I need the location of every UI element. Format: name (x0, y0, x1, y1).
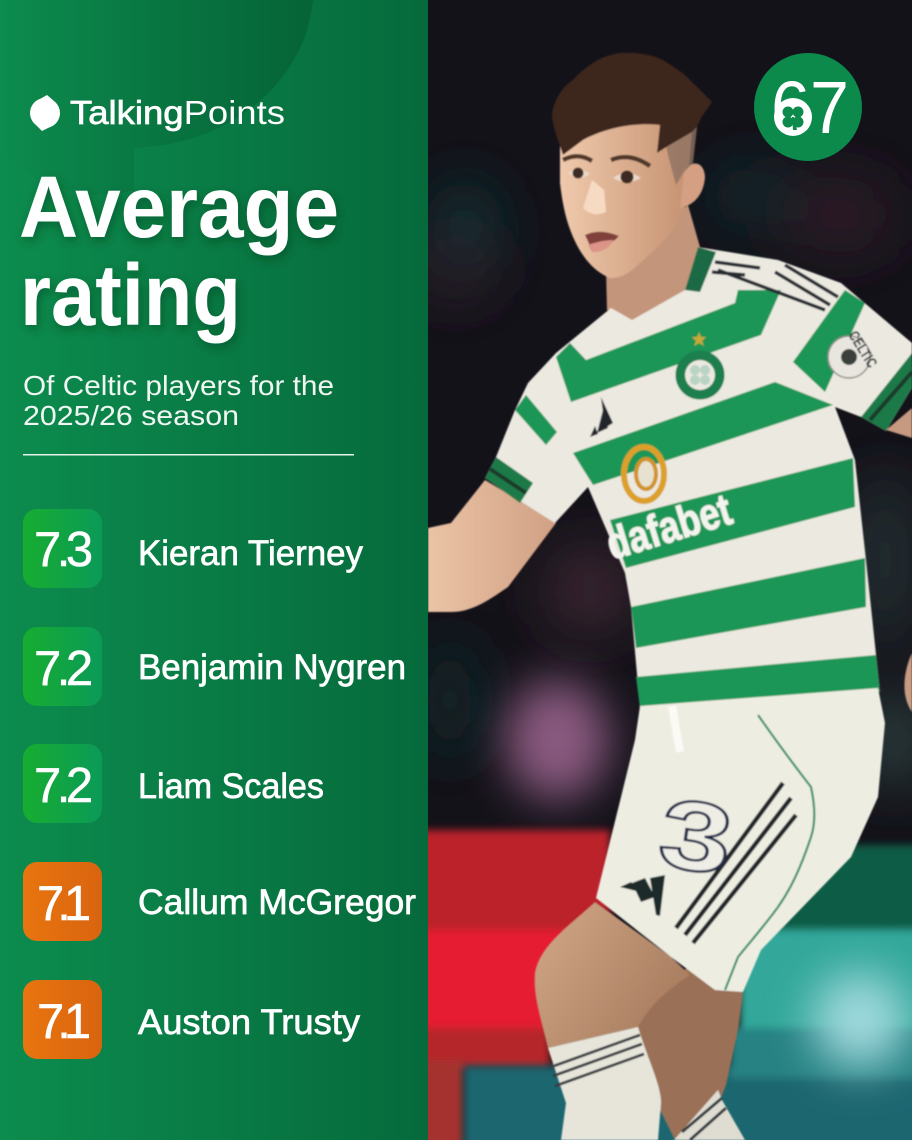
far leg and sock (636, 968, 746, 1140)
pink crowd blob (505, 680, 609, 800)
shorts drawstring (672, 706, 680, 752)
player name: Liam Scales (138, 767, 324, 806)
title: Average (19, 159, 339, 256)
logo mark (30, 95, 60, 131)
sleeve lettering: CELTIC (845, 328, 880, 371)
sponsor wordmark: dafabet (600, 483, 737, 570)
row: Benjamin Nygren 7.2 (23, 627, 406, 706)
rating badge (23, 862, 102, 941)
head (552, 53, 712, 278)
rating value: 7.2 (34, 759, 91, 813)
eyebrows (563, 156, 650, 166)
collar (685, 247, 716, 292)
nose (583, 180, 606, 214)
shoulder stripes (712, 262, 838, 310)
subtitle (23, 370, 334, 431)
shorts (596, 688, 885, 992)
sleeve band (793, 290, 865, 392)
rating value: 7.3 (34, 523, 92, 577)
adidas chest logo (590, 397, 613, 437)
adidas shorts logo (620, 875, 665, 916)
wordmark: Talking Points (70, 94, 285, 131)
hair (552, 53, 712, 155)
row: Liam Scales 7.2 (23, 744, 324, 823)
player name: Auston Trusty (138, 1003, 361, 1042)
brand logo (30, 94, 285, 131)
eyes (568, 169, 641, 182)
photo background: blurred stadium crowd (415, 0, 912, 1140)
shorts number: 3 (653, 777, 739, 896)
player name: Benjamin Nygren (138, 648, 406, 687)
hoop: sponsor (610, 458, 855, 568)
sleeve patch (828, 336, 870, 378)
clover (782, 106, 804, 130)
player illustration (428, 53, 912, 1140)
rating value: 7.2 (34, 642, 91, 696)
gold star (692, 332, 706, 346)
player name: Kieran Tierney (138, 534, 363, 573)
rating badge (23, 509, 102, 588)
shirt (485, 247, 912, 708)
green pitch-side board (464, 845, 912, 1140)
shorts piping (725, 715, 814, 990)
shorts side stripes (676, 783, 796, 943)
fade (664, 127, 697, 185)
rating badge (23, 744, 102, 823)
number 67: 67 (771, 66, 849, 149)
red advertising board (420, 830, 610, 1140)
badge: 67 clover (754, 53, 862, 161)
hoop: hem (636, 655, 880, 708)
pale light blobs on board (812, 972, 908, 1068)
ear (680, 164, 705, 208)
hoop: lower (631, 558, 866, 648)
subtitle: 2025/26 season (23, 400, 239, 431)
rating badge (23, 980, 102, 1059)
sponsor roundel (624, 447, 664, 501)
panel: left green background (0, 0, 428, 1140)
sleeve cuff (861, 353, 912, 431)
hoop: chest (573, 382, 833, 485)
row: Auston Trusty 7.1 (23, 980, 361, 1059)
mouth (585, 232, 619, 250)
left arm (428, 480, 556, 612)
rating value: 7.1 (37, 995, 89, 1049)
hoop: yoke (556, 290, 781, 402)
right forearm and hand (886, 408, 912, 712)
rating badge (23, 627, 102, 706)
neck (606, 205, 700, 325)
rating value: 7.1 (37, 877, 89, 931)
title (19, 159, 339, 344)
row: Callum McGregor 7.1 (23, 862, 416, 941)
club crest (676, 350, 724, 400)
left sleeve band and cuff (515, 395, 557, 445)
decorative dark arc shape (0, 0, 313, 195)
near sock (548, 1027, 661, 1140)
near leg (535, 902, 690, 1048)
title: rating (20, 247, 241, 344)
subtitle: Of Celtic players for the (23, 370, 334, 401)
player name: Callum McGregor (138, 883, 416, 922)
row: Kieran Tierney 7.3 (23, 509, 363, 588)
